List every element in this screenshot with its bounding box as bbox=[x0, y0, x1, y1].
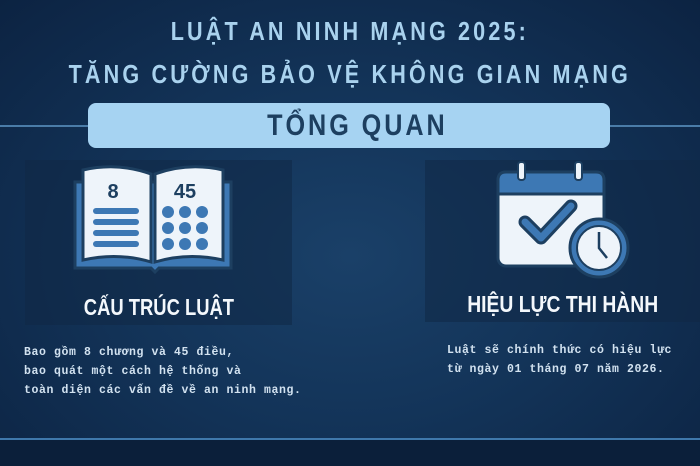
text: effective date: Luật sẽ chính thức có hiệu lực bbox=[447, 344, 672, 357]
title: LUẬT AN NINH MẠNG 2025: bbox=[171, 16, 529, 46]
text: structure: bao quát một cách hệ thống và bbox=[24, 365, 242, 378]
text: structure: Bao gồm 8 chương và 45 điều, bbox=[24, 346, 234, 359]
panel: structure bbox=[25, 160, 292, 325]
section banner: TỔNG QUAN bbox=[267, 109, 447, 142]
heading: structure: CẤU TRÚC LUẬT bbox=[83, 294, 234, 320]
icon: book: 45 bbox=[174, 181, 196, 203]
panel: effective date bbox=[425, 160, 700, 322]
text: effective date: từ ngày 01 tháng 07 năm 2026. bbox=[447, 363, 665, 376]
icon: calendar with clock bbox=[496, 161, 630, 278]
title bbox=[68, 16, 631, 89]
icon: book: 8 bbox=[107, 181, 119, 203]
title: TĂNG CƯỜNG BẢO VỆ KHÔNG GIAN MẠNG bbox=[69, 59, 631, 89]
text: structure: toàn diện các vấn đề về an ninh mạng. bbox=[24, 384, 302, 397]
text: effective date bbox=[447, 344, 672, 376]
section banner bbox=[88, 103, 610, 148]
icon: book bbox=[74, 165, 232, 274]
text: structure bbox=[24, 346, 302, 397]
heading: effective date: HIỆU LỰC THI HÀNH bbox=[467, 291, 658, 317]
